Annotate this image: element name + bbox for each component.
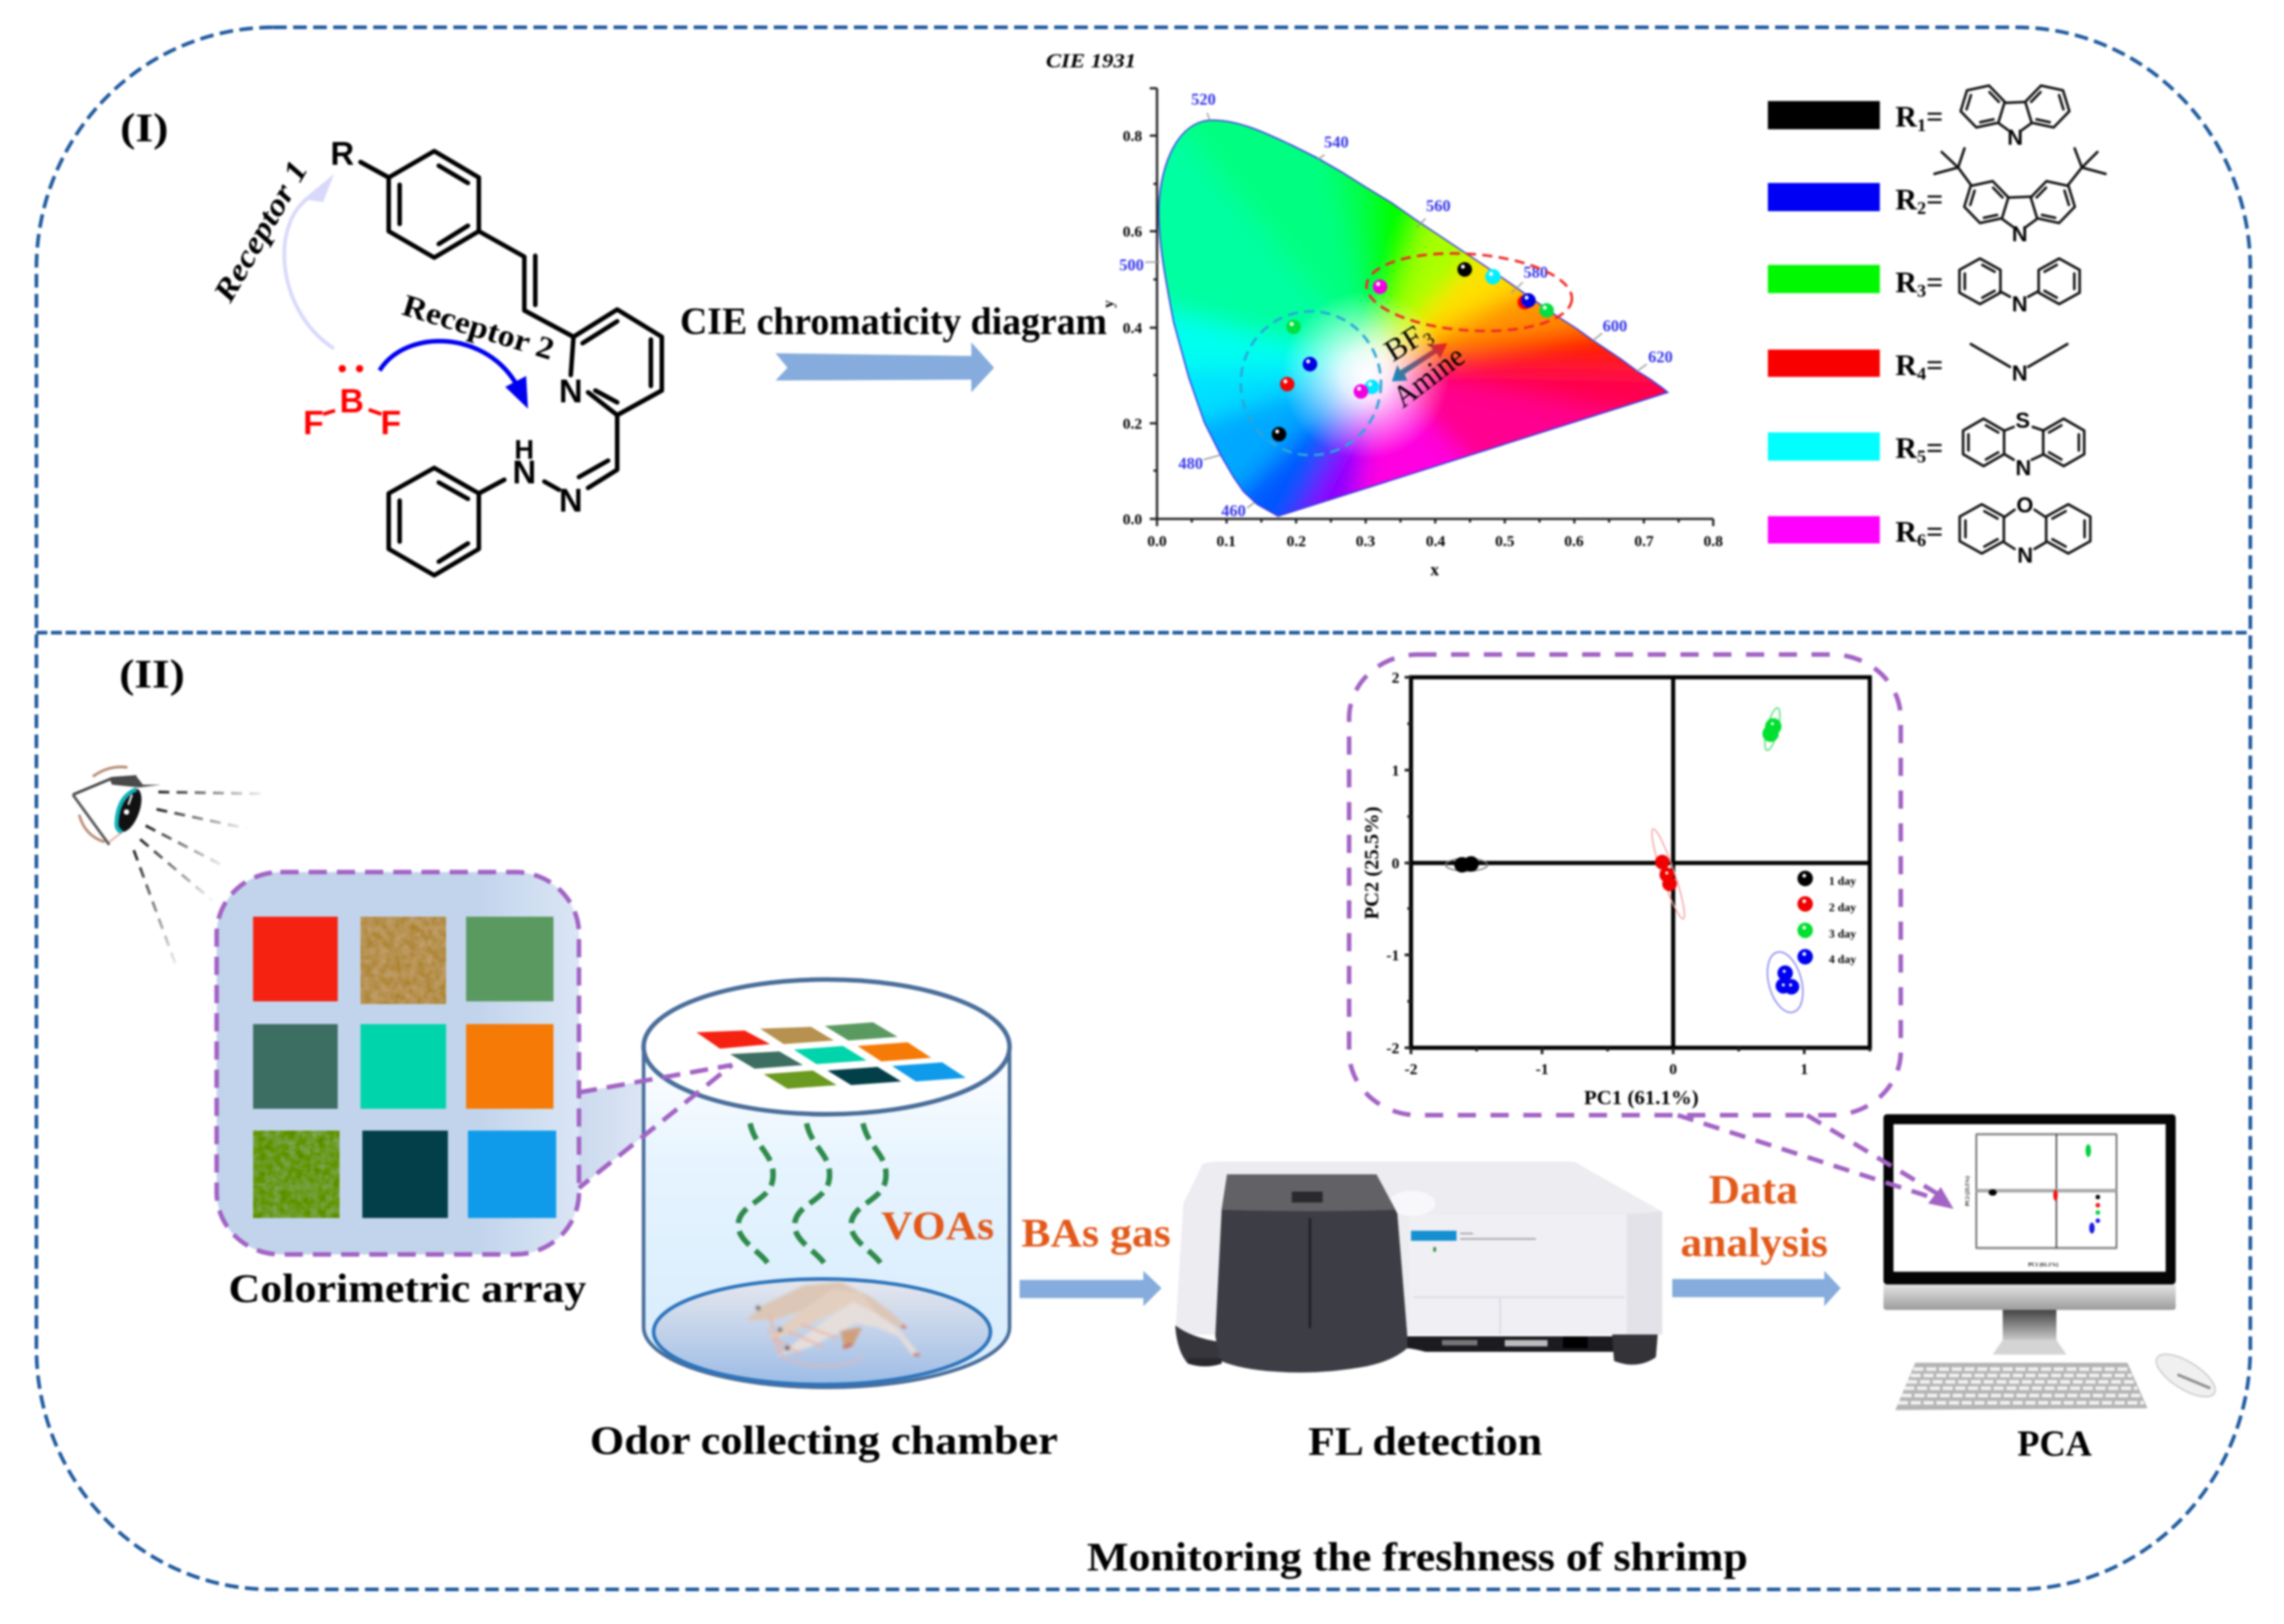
spectral locus outline — [1159, 120, 1668, 516]
legend item R5: N — [2015, 456, 2031, 481]
BF3 group: F — [381, 404, 401, 442]
axis titles: PC2 (25.5%) — [1360, 807, 1383, 919]
axis tick labels: -1 — [1386, 947, 1399, 964]
BF3 group — [303, 365, 401, 442]
scatter points — [1455, 718, 1799, 994]
plot legend: 3 day — [1829, 927, 1856, 940]
legend: R group substituents — [1768, 80, 2106, 568]
legend item R5: = — [1926, 432, 1944, 465]
legend item R3: = — [1926, 267, 1944, 299]
dark column — [1215, 1174, 1407, 1373]
legend item R5: S — [2015, 409, 2030, 433]
label: VOAs: VOAs — [881, 1203, 994, 1248]
molecule: receptor scaffold: R — [330, 135, 354, 172]
arrow: detector to computer — [1672, 1271, 1841, 1306]
label: Amine: Amine — [1387, 340, 1471, 414]
x axis labels: 0.5 — [1495, 533, 1515, 550]
panel: section I — [120, 49, 2106, 583]
arrow: to CIE diagram — [776, 342, 994, 392]
label: data analysis: Data — [1709, 1166, 1798, 1213]
axis tick labels: -2 — [1405, 1061, 1417, 1078]
molecule: receptor scaffold: N — [559, 482, 583, 519]
arrow: receptor 2 — [380, 341, 528, 409]
label: PCA: PCA — [2017, 1423, 2092, 1464]
data points — [1272, 262, 1554, 442]
mini PCA plot: PC1 (61.1%) — [2028, 1262, 2058, 1268]
arrow: PCA plot to monitor — [1678, 1115, 1954, 1209]
heading: section II label: (II) — [119, 652, 185, 696]
heading: section I label: (I) — [120, 106, 168, 150]
legend item R2: R — [1895, 184, 1917, 217]
panel: colorimetric array — [217, 872, 579, 1254]
legend item R2: = — [1926, 184, 1944, 217]
legend item R4: = — [1926, 350, 1944, 382]
y axis labels: 0.4 — [1122, 320, 1142, 337]
dish — [654, 1279, 990, 1385]
mini PCA plot — [1964, 1134, 2117, 1268]
legend item R1: R — [1895, 101, 1917, 134]
x axis labels: 0.6 — [1564, 533, 1584, 550]
legend item R1: = — [1926, 101, 1944, 134]
plot legend: 1 day — [1829, 874, 1856, 888]
axis tick labels: -1 — [1536, 1061, 1548, 1078]
axis titles — [1360, 807, 1699, 1109]
chart: CIE 1931 chromaticity diagram — [1046, 49, 1723, 583]
keyboard — [1895, 1363, 2147, 1410]
computer with PCA plot — [1883, 1114, 2221, 1410]
legend item R4: R — [1895, 350, 1917, 382]
axis tick labels: 1 — [1392, 762, 1399, 779]
label: odor collecting chamber: Odor collecting chamber — [590, 1418, 1058, 1463]
x axis labels: 0.1 — [1216, 533, 1236, 550]
plot frame and axes — [1411, 677, 1870, 1048]
wavelength labels: 540 — [1324, 133, 1349, 151]
x axis labels — [1147, 533, 1723, 580]
left base — [1175, 1325, 1220, 1364]
callout wedge: array to chamber — [579, 1065, 732, 1188]
axis titles: PC1 (61.1%) — [1584, 1086, 1699, 1109]
plot legend — [1797, 870, 1856, 966]
wavelength labels: 460 — [1222, 502, 1245, 520]
monitor — [1883, 1114, 2176, 1284]
BF3 group: B — [340, 382, 364, 420]
legend item R5: R — [1895, 432, 1917, 465]
mouse — [2150, 1346, 2221, 1405]
mini array on chamber lid — [696, 1022, 966, 1089]
blue dashed cluster ellipse — [1241, 311, 1381, 455]
section divider — [36, 631, 2250, 634]
legend item R5 — [1768, 409, 2085, 481]
axis tick labels: 1 — [1801, 1061, 1808, 1078]
molecule: receptor scaffold: N — [559, 372, 583, 410]
label: receptor 1: Receptor 1 — [207, 156, 315, 309]
molecule: receptor scaffold: H — [514, 435, 534, 465]
wavelength labels: 580 — [1524, 263, 1548, 281]
colour swatches — [253, 917, 556, 1218]
legend item R2 — [1768, 148, 2106, 247]
axis tick labels: 0 — [1392, 855, 1399, 872]
y axis labels: 0.8 — [1122, 127, 1142, 145]
panel: PCA score plot — [1349, 655, 1901, 1115]
wavelength labels: 600 — [1602, 317, 1628, 335]
label: BAs gas: BAs gas — [1021, 1211, 1171, 1255]
x axis labels: 0.3 — [1355, 533, 1375, 550]
plot legend: 4 day — [1829, 952, 1856, 966]
plot legend: 2 day — [1829, 900, 1856, 914]
BF3 group: F — [303, 404, 324, 442]
arrow: receptor 1 — [284, 174, 334, 349]
mini PCA plot: PC2 (25.5%) — [1964, 1176, 1971, 1206]
chamber lid — [644, 979, 1010, 1114]
axis tick labels: 0 — [1670, 1061, 1677, 1078]
axes — [1150, 88, 1713, 526]
wavelength labels: 480 — [1178, 454, 1203, 472]
legend item R3 — [1768, 259, 2080, 317]
label: CIE chromaticity diagram: CIE chromaticity diagram — [680, 301, 1107, 343]
wavelength labels — [1120, 90, 1673, 520]
label: data analysis — [1680, 1166, 1828, 1265]
legend item R6 — [1768, 493, 2090, 568]
odor collecting chamber — [644, 979, 1010, 1387]
legend item R6: = — [1926, 516, 1944, 549]
x axis labels: 0.7 — [1634, 533, 1654, 550]
FL detection instrument — [1175, 1162, 1662, 1373]
chart title: CIE 1931 — [1046, 49, 1136, 72]
molecule: receptor scaffold — [330, 135, 662, 575]
axis tick labels — [1386, 669, 1808, 1078]
icon: eye with sight lines — [73, 766, 265, 969]
y axis labels — [1100, 127, 1142, 528]
label: BF3: BF — [1379, 320, 1429, 369]
arrow: chamber to detector — [1020, 1271, 1162, 1306]
legend item R6: 6 — [1917, 531, 1926, 551]
legend item R1: N — [2007, 126, 2023, 150]
legend item R6: N — [2017, 543, 2033, 568]
label: FL detection: FL detection — [1308, 1419, 1542, 1464]
y axis labels: y — [1100, 299, 1117, 308]
wavelength labels: 620 — [1648, 348, 1673, 366]
x axis labels: 0.8 — [1703, 533, 1723, 550]
legend item R6: O — [2016, 493, 2034, 518]
instrument body — [1175, 1162, 1662, 1335]
y axis labels: 0.6 — [1122, 223, 1142, 240]
red dashed cluster ellipse — [1364, 247, 1575, 338]
label: colorimetric array: Colorimetric array — [228, 1266, 586, 1311]
legend item R1 — [1768, 80, 2073, 150]
wavelength labels: 520 — [1191, 90, 1216, 108]
wavelength labels: 560 — [1426, 197, 1451, 215]
x axis labels: 0.2 — [1286, 533, 1306, 550]
y axis labels: 0.0 — [1122, 511, 1142, 528]
legend item R3: 3 — [1917, 281, 1926, 301]
legend item R5: 5 — [1917, 447, 1926, 467]
legend item R1: 1 — [1917, 116, 1926, 136]
panel: section II — [73, 652, 2221, 1579]
legend item R4: N — [2012, 361, 2027, 386]
legend item R2: N — [2012, 222, 2027, 247]
callout dashed edges — [579, 1065, 732, 1188]
axis tick labels: -2 — [1386, 1040, 1399, 1057]
chromaticity gamut — [1158, 119, 1668, 517]
instrument badge — [1411, 1231, 1457, 1241]
instrument base — [1407, 1336, 1614, 1352]
legend item R3: R — [1895, 267, 1917, 299]
arrow: BF3 / amine shift — [1392, 343, 1447, 381]
axis ticks — [1405, 677, 1870, 1054]
x axis labels: 0.0 — [1147, 533, 1167, 550]
caption: monitoring the freshness of shrimp: Monitoring the freshness of shrimp — [1087, 1535, 1748, 1579]
label: receptor 2: Receptor 2 — [399, 289, 558, 367]
y axis labels: 0.2 — [1122, 415, 1142, 432]
legend item R4 — [1768, 344, 2067, 386]
confidence ellipses — [1446, 706, 1809, 1017]
label: BF3: 3 — [1420, 329, 1438, 350]
x axis labels: 0.4 — [1426, 533, 1446, 550]
wavelength labels: 500 — [1120, 256, 1143, 274]
rising vapour — [738, 1123, 886, 1267]
axis tick labels: 2 — [1392, 669, 1399, 686]
legend item R4: 4 — [1917, 364, 1926, 384]
legend item R6: R — [1895, 516, 1917, 549]
legend item R2: 2 — [1917, 198, 1926, 218]
molecule: receptor scaffold: N — [513, 453, 536, 491]
x axis labels: x — [1430, 561, 1439, 580]
label: data analysis: analysis — [1680, 1219, 1828, 1265]
legend item R3: N — [2012, 292, 2027, 317]
shrimp — [746, 1282, 919, 1365]
